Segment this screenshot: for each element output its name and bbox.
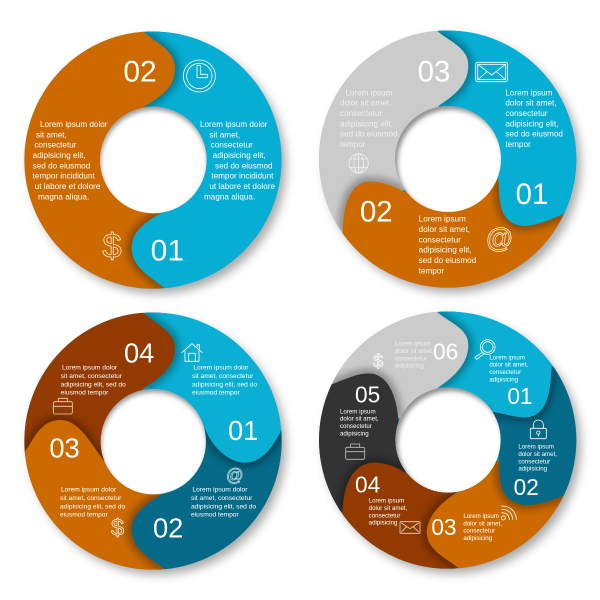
text block left: adipisicing elit,	[33, 151, 86, 160]
segment 02	[342, 178, 565, 288]
text block blue: sit amet, consectetur	[192, 373, 254, 380]
segment 03	[426, 460, 564, 568]
number 02: 02	[360, 196, 393, 229]
number 02: 02	[123, 56, 157, 89]
segment 03	[24, 420, 165, 570]
text block teal: Lorem ipsum dolor	[192, 487, 248, 494]
segment 06	[331, 312, 468, 418]
icon: wifi	[501, 506, 516, 520]
text block blue: Lorem ipsum	[505, 88, 553, 97]
number 01: 01	[507, 383, 533, 409]
text block left	[33, 120, 108, 201]
icon: magnifier	[475, 340, 495, 359]
text block brown: adipisicing elit, sed do	[61, 381, 126, 388]
text block blue: adipisicing elit,	[505, 119, 558, 128]
text block right: Lorem ipsum dolor	[200, 120, 268, 129]
text block brown: consectetur	[369, 512, 400, 519]
text block orange: tempor	[419, 266, 444, 275]
text block left: consectetur	[34, 141, 77, 150]
text block dark: Lorem ipsum	[340, 408, 376, 415]
ring segments	[319, 311, 576, 569]
text block gray: Lorem ipsum	[345, 88, 393, 97]
icon: lock	[530, 420, 546, 439]
number 03: 03	[418, 56, 450, 89]
text block blue: sed do eiusmod	[505, 130, 563, 139]
segment 01 base	[319, 30, 576, 288]
ring segments	[24, 31, 282, 289]
text block brown: adipisicing	[369, 520, 398, 527]
text block gray	[395, 341, 434, 370]
text block brown: Lorem ipsum dolor	[62, 365, 118, 372]
text block orange	[463, 513, 502, 542]
text block orange: Lorem ipsum	[419, 215, 466, 224]
icon: clock	[183, 60, 215, 92]
ring drop shadow	[30, 38, 286, 294]
number 01: 01	[228, 415, 258, 446]
number 03: 03	[49, 433, 80, 464]
segment 02	[492, 366, 576, 506]
text block orange: eiusmod tempor	[60, 512, 109, 519]
text block left: sed do eiusmod	[33, 161, 91, 170]
number 01: 01	[151, 235, 184, 268]
text block gray: Lorem ipsum	[395, 341, 431, 348]
text block gray	[340, 88, 398, 149]
ring segments	[319, 30, 576, 288]
text block orange: consectetur	[463, 528, 495, 535]
text block teal: Lorem ipsum	[518, 444, 554, 451]
text block teal: eiusmod tempor	[191, 512, 240, 519]
ring drop shadow	[325, 318, 581, 574]
number 02: 02	[153, 513, 183, 544]
segment 01 base	[24, 312, 282, 570]
text block orange: adipisicing elit, sed do	[60, 503, 125, 510]
text block gray: sed do eiusmod	[340, 130, 398, 139]
text block gray: adipisicing	[395, 363, 424, 370]
text block gray: adipisicing elit,	[340, 119, 393, 128]
text block blue	[505, 88, 563, 149]
icon: globe	[349, 154, 368, 173]
text block blue: adipisicing elit, sed do	[192, 381, 257, 388]
text block gray: dolor sit amet,	[340, 99, 391, 108]
text block dark: dolor sit amet,	[340, 416, 379, 423]
ring drop shadow	[30, 319, 286, 575]
segment 04	[24, 312, 175, 462]
segment 05	[319, 373, 406, 512]
segment 04	[340, 462, 458, 569]
text block brown: Lorem ipsum	[369, 498, 404, 505]
number 05: 05	[355, 381, 380, 407]
number 06: 06	[433, 338, 458, 364]
text block gray: consectetur	[340, 109, 382, 118]
text block teal	[518, 444, 557, 473]
text block orange: sit amet, consectetur	[60, 495, 122, 502]
text block blue: dolor sit amet,	[489, 362, 528, 369]
text block dark: consectetur	[340, 423, 372, 430]
segment 01 tip	[132, 212, 234, 288]
text block right: consectetur	[211, 141, 253, 150]
segment 02	[24, 32, 175, 289]
text block orange: adipisicing	[463, 535, 493, 542]
centre hole	[395, 387, 501, 493]
text block blue: eiusmod tempor	[192, 390, 241, 397]
text block teal: adipisicing elit, sed do	[191, 503, 256, 510]
segment 01 tip	[492, 364, 552, 418]
centre hole	[100, 389, 206, 494]
text block left: sit amet,	[36, 130, 67, 139]
icon: house	[182, 344, 202, 361]
text block brown: sit amet, consectetur	[61, 373, 123, 380]
segment 01 tip	[205, 367, 282, 463]
number 04: 04	[355, 472, 380, 498]
text block right: sed do eiusmod	[215, 161, 273, 170]
text block orange: Lorem ipsum dolor	[61, 487, 117, 494]
text block orange: dolor sit amet,	[463, 520, 502, 527]
text block teal: sit amet, consectetur	[191, 495, 253, 502]
number 02: 02	[514, 474, 539, 500]
text block orange: Lorem ipsum	[463, 513, 499, 520]
text block gray: dolor sit amet,	[395, 348, 434, 355]
segment 01 base	[319, 311, 576, 569]
segment 01 tip	[498, 133, 576, 226]
text block right: tempor incididunt	[211, 172, 274, 181]
segment 01 base	[24, 31, 282, 289]
text block orange: dolor sit amet,	[419, 225, 470, 234]
text block teal: adipisicing	[518, 466, 548, 473]
text block blue: Lorem ipsum	[489, 354, 525, 361]
text block orange	[419, 215, 477, 275]
panel: six-step ring	[319, 311, 586, 580]
text block blue: dolor sit amet,	[505, 99, 557, 108]
text block left: tempor incididunt	[33, 172, 96, 181]
text block teal	[191, 487, 256, 519]
text block teal: consectetur	[518, 458, 550, 465]
number 04: 04	[124, 338, 154, 369]
icon: dollar: $	[111, 514, 124, 540]
text block teal: dolor sit amet,	[518, 451, 557, 458]
ring drop shadow	[325, 37, 581, 293]
text block left: ut labore et dolore	[35, 182, 101, 191]
text block right: ut labore et dolore	[209, 182, 276, 191]
text block blue	[192, 365, 257, 397]
icon: dollar: $	[102, 227, 122, 265]
text block left: Lorem ipsum dolor	[40, 120, 108, 129]
text block blue: consectetur	[489, 369, 521, 376]
text block dark: adipisicing	[340, 430, 369, 437]
text block brown: dolor sit amet,	[369, 505, 408, 512]
text block orange	[60, 487, 125, 519]
segment 03	[319, 31, 468, 234]
panel: two-step ring	[24, 31, 292, 300]
text block blue: adipisicing	[489, 376, 519, 383]
text block orange: consectetur	[419, 235, 461, 244]
text block blue: consectetur	[505, 109, 548, 118]
text block orange: sed do eiusmod	[419, 256, 477, 265]
text block right: adipisicing elit,	[213, 151, 266, 160]
text block blue	[489, 354, 528, 383]
icon: envelope	[400, 522, 420, 533]
text block blue: Lorem ipsum dolor	[193, 365, 249, 372]
text block right: magna aliqua.	[204, 192, 255, 201]
centre hole	[100, 106, 207, 214]
centre hole	[395, 106, 501, 212]
icon: dollar: $	[373, 350, 384, 371]
text block brown	[61, 365, 126, 397]
segment 02	[132, 428, 282, 570]
panel: four-step ring	[24, 312, 292, 580]
icon: at sign: @	[226, 465, 244, 485]
icon: envelope	[476, 62, 508, 82]
icon: briefcase	[53, 398, 72, 414]
text block gray: tempor	[340, 140, 366, 149]
text block right	[200, 120, 276, 201]
text block dark	[340, 408, 379, 437]
text block right: sit amet,	[209, 130, 240, 139]
text block gray: consectetur	[395, 355, 427, 362]
number 03: 03	[431, 514, 457, 540]
text block brown	[369, 498, 408, 527]
text block blue: tempor	[505, 140, 531, 149]
text block left: magna aliqua.	[38, 192, 89, 201]
ring segments	[24, 312, 282, 570]
panel: three-step ring	[319, 30, 586, 298]
text block orange: adipisicing elit,	[419, 246, 472, 255]
number 01: 01	[516, 178, 548, 211]
text block brown: eiusmod tempor	[61, 390, 109, 397]
icon: briefcase	[346, 444, 365, 459]
icon: at sign: @	[486, 222, 513, 253]
